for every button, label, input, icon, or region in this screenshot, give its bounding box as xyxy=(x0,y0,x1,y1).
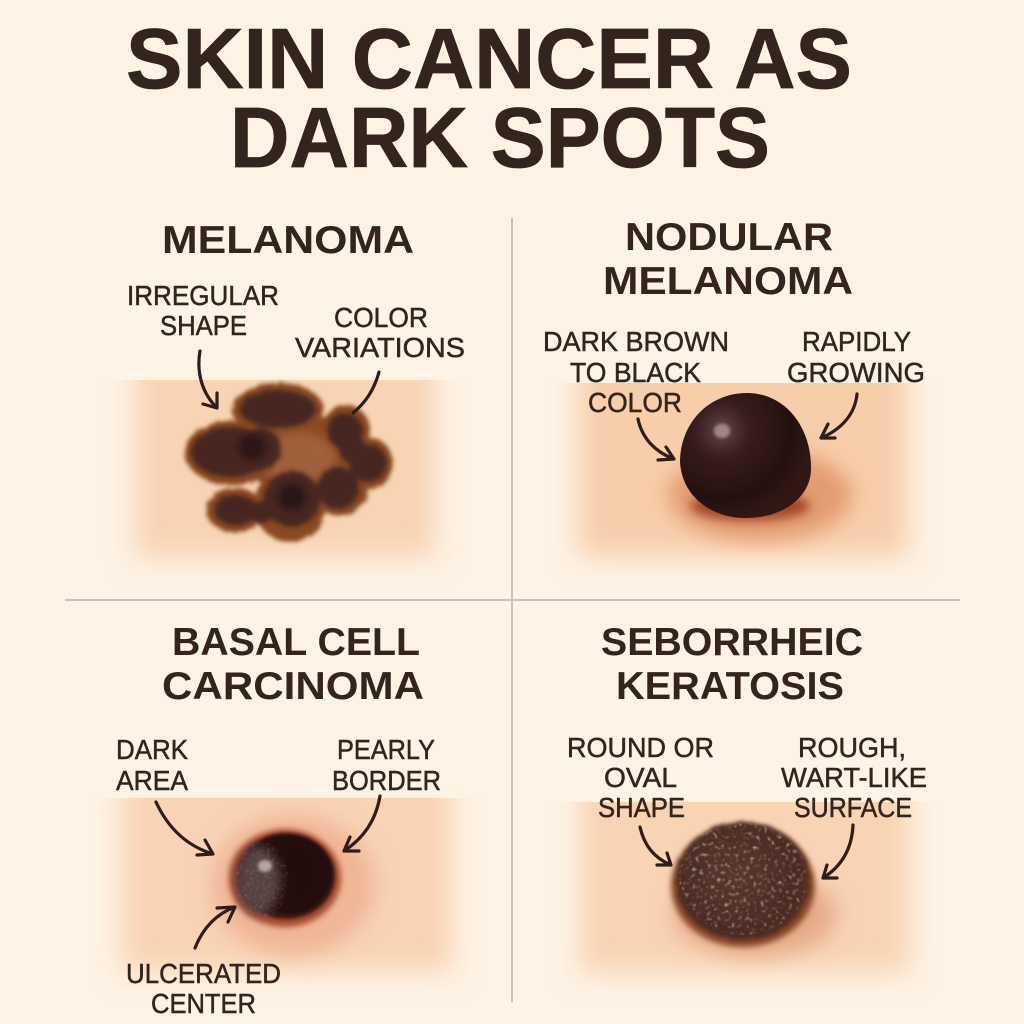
lesion: nodular dome xyxy=(668,393,852,541)
label: dark brown to black color xyxy=(543,326,729,418)
label: ulcerated center: ULCERATED xyxy=(126,958,281,989)
label: irregular shape: IRREGULAR xyxy=(127,280,279,311)
label: dark area: DARK xyxy=(116,734,188,765)
heading: basal cell carcinoma: CARCINOMA xyxy=(162,665,424,708)
panel: seborrheic keratosis xyxy=(567,621,927,973)
panel: basal cell carcinoma xyxy=(116,621,452,1019)
skin patch: melanoma xyxy=(135,340,435,558)
title xyxy=(126,12,852,186)
label: rough wart-like surface: SURFACE xyxy=(794,792,912,823)
heading: basal cell carcinoma xyxy=(162,621,424,708)
arrow: round or oval shape xyxy=(640,827,671,865)
label: irregular shape xyxy=(127,280,279,341)
label: pearly border: BORDER xyxy=(332,765,441,796)
label: rough wart-like surface: ROUGH, xyxy=(798,732,906,763)
arrow: rough wart-like surface xyxy=(823,825,853,878)
label: rapidly growing xyxy=(787,326,925,388)
label: dark area: AREA xyxy=(116,765,188,796)
label: color variations: COLOR xyxy=(334,302,428,333)
label: color variations: VARIATIONS xyxy=(295,332,465,363)
label: round or oval shape: ROUND OR xyxy=(567,732,714,763)
label: round or oval shape: SHAPE xyxy=(598,792,685,823)
title: DARK SPOTS xyxy=(230,91,770,186)
heading: basal cell carcinoma: BASAL CELL xyxy=(172,621,420,664)
arrow: dark brown color xyxy=(638,419,674,460)
arrow: pearly border xyxy=(344,796,380,851)
label: rough wart-like surface: WART-LIKE xyxy=(781,762,927,793)
label: dark brown to black color: DARK BROWN xyxy=(543,326,729,357)
skin patch: nodular melanoma xyxy=(578,345,908,557)
heading: seborrheic keratosis: KERATOSIS xyxy=(616,665,844,708)
lesion: basal cell carcinoma xyxy=(211,815,375,955)
label: rapidly growing: GROWING xyxy=(787,357,925,388)
label: dark area xyxy=(116,734,188,796)
label: dark brown to black color: COLOR xyxy=(588,387,682,418)
panel: nodular melanoma xyxy=(543,216,925,557)
heading: nodular melanoma xyxy=(603,216,853,303)
label: color variations xyxy=(295,302,465,363)
arrow: color variations xyxy=(353,372,379,413)
arrow: rapidly growing xyxy=(821,394,857,438)
arrow: dark area xyxy=(156,802,213,855)
label: rapidly growing: RAPIDLY xyxy=(802,326,911,357)
arrow: ulcerated center xyxy=(195,907,235,948)
label: dark brown to black color: TO BLACK xyxy=(570,357,701,388)
skin patch: basal cell carcinoma xyxy=(122,760,452,972)
heading: nodular melanoma: NODULAR xyxy=(625,216,833,259)
label: round or oval shape xyxy=(567,732,714,823)
label: pearly border xyxy=(332,734,441,796)
lesion: irregular melanoma xyxy=(185,383,393,542)
label: rough wart-like surface xyxy=(781,732,927,823)
heading: nodular melanoma: MELANOMA xyxy=(603,260,853,303)
lesion: seborrheic keratosis xyxy=(671,822,837,957)
label: ulcerated center: CENTER xyxy=(151,988,256,1019)
skin patch: seborrheic keratosis xyxy=(580,765,910,973)
panel: melanoma xyxy=(127,219,465,558)
label: pearly border: PEARLY xyxy=(337,734,435,765)
heading: melanoma: MELANOMA xyxy=(162,219,414,262)
label: ulcerated center xyxy=(126,958,281,1019)
label: round or oval shape: OVAL xyxy=(604,762,677,793)
heading: seborrheic keratosis xyxy=(601,621,863,708)
label: irregular shape: SHAPE xyxy=(160,310,247,341)
title: SKIN CANCER AS xyxy=(126,12,852,107)
heading: seborrheic keratosis: SEBORRHEIC xyxy=(601,621,863,664)
arrow: irregular shape xyxy=(199,351,217,408)
